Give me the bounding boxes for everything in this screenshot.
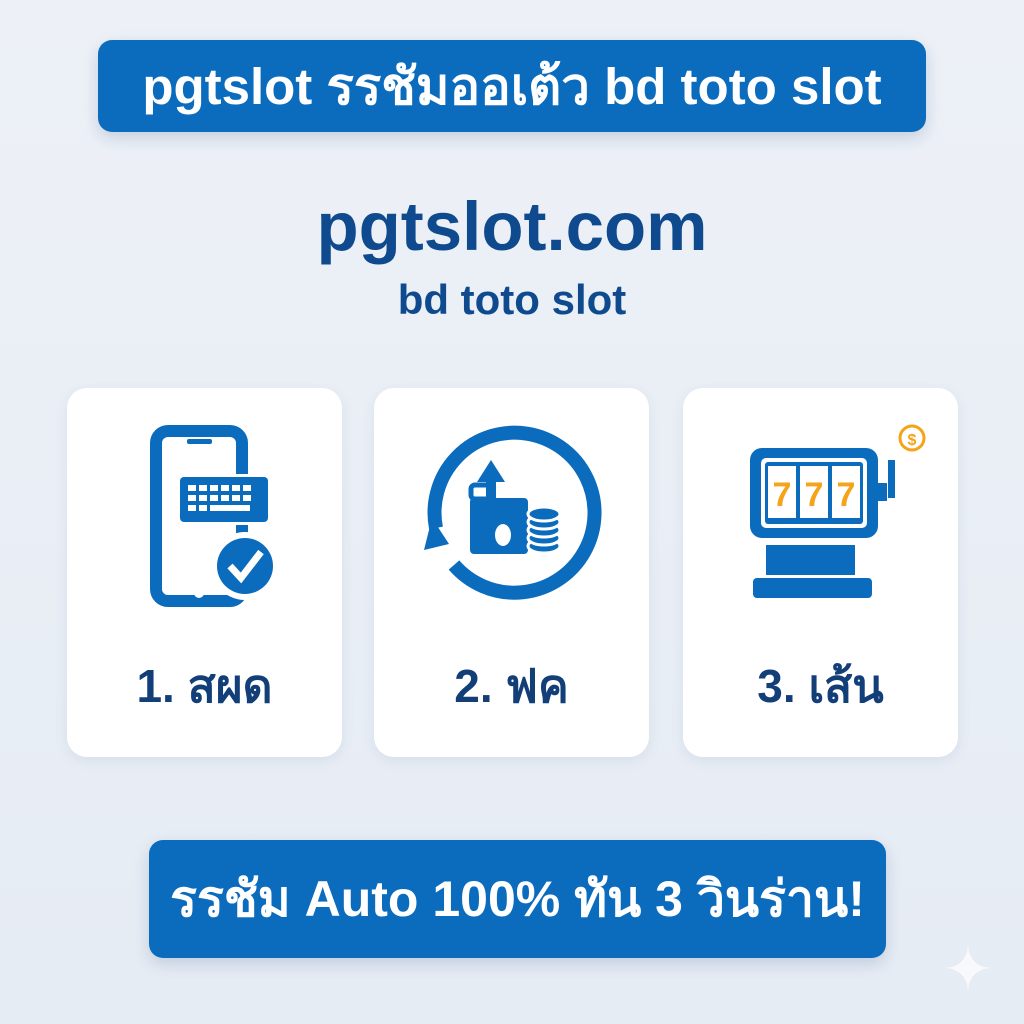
icon: slot machine 777: 7 [837, 476, 855, 514]
panel: step 1 [67, 388, 342, 757]
icon: slot machine 777: 7 [773, 476, 791, 514]
panel: step 3 [683, 388, 958, 757]
icon: phone with keyboard and check [150, 425, 273, 607]
icon: slot machine 777: 7 [805, 476, 823, 514]
title banner [98, 40, 926, 132]
label: step 2: 2. ฟค [454, 660, 569, 712]
panel: step 2 [374, 388, 649, 757]
title banner: pgtslot รรชัมออเต้ว bd toto slot [142, 58, 882, 114]
icon: sparkle [948, 948, 988, 988]
icon: slot machine 777: $ [908, 432, 917, 449]
label: step 1: 1. สผด [136, 660, 273, 712]
subheading: bd toto slot [398, 276, 626, 323]
callout banner [149, 840, 886, 958]
heading: site name: pgtslot.com [316, 188, 708, 265]
icon: slot machine 777 [750, 424, 926, 598]
icon: circular arrow with wallet and coins [424, 426, 602, 600]
callout banner: รรชัม Auto 100% ทัน 3 วินร่าน! [170, 870, 865, 926]
label: step 3: 3. เส้น [757, 660, 884, 712]
